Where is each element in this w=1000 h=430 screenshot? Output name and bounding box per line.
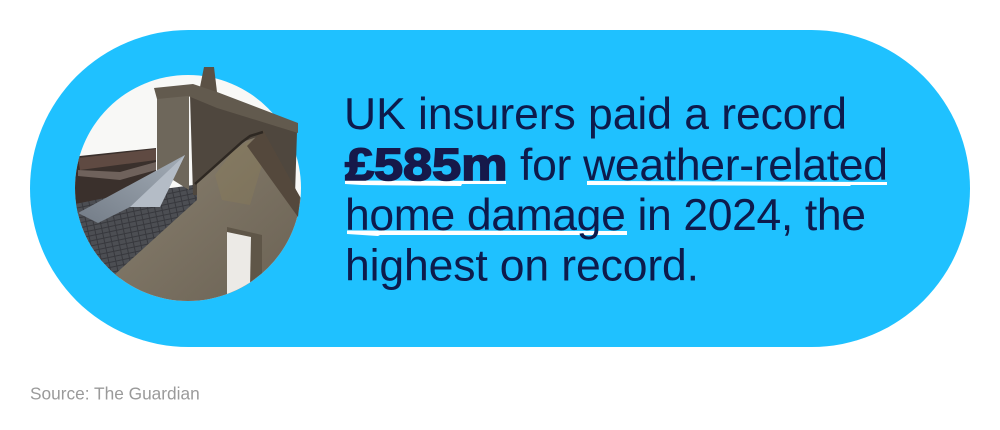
slate roof: [70, 185, 200, 280]
chimney pot: [200, 67, 217, 92]
line 2: amount: £585m: [345, 140, 507, 190]
white door: [227, 232, 251, 296]
headline text: [344, 90, 888, 290]
chimney left face: [157, 94, 189, 190]
line 1: UK insurers paid a record: [344, 90, 847, 139]
panel: blue pill: [30, 30, 970, 347]
image: damaged roof and chimney: [70, 67, 305, 305]
door frame: [227, 227, 262, 300]
source: Source: The Guardian: [30, 384, 200, 404]
gable edge: [247, 130, 300, 217]
underline: amount: [345, 180, 506, 186]
moss patch: [215, 140, 262, 205]
image background circle: [75, 75, 301, 301]
wall: [112, 135, 305, 305]
chimney cap: [154, 84, 298, 133]
line 2: rest: for weather-related: [520, 141, 888, 190]
metal flap: [78, 155, 185, 223]
underline: weather-related: [587, 181, 887, 186]
crack: [195, 132, 263, 184]
line 3: home damage in 2024, the: [345, 191, 866, 240]
line 4: highest on record.: [345, 242, 699, 290]
chimney right face: [190, 95, 297, 195]
distant damaged roof: [70, 148, 156, 215]
underline: home damage: [347, 230, 627, 236]
